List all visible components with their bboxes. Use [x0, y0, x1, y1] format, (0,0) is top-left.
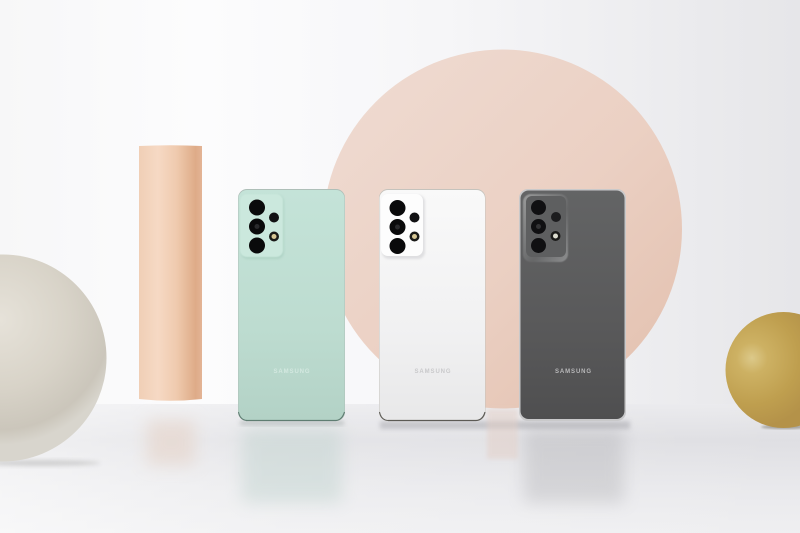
- logo: SAMSUNG: [274, 369, 310, 375]
- background wall: [0, 0, 800, 410]
- phone: mint: [238, 189, 345, 421]
- pink disc: [323, 50, 682, 408]
- phone: white: [379, 189, 486, 421]
- logo: SAMSUNG: [415, 369, 451, 375]
- floor: [0, 404, 800, 533]
- camera module: [523, 194, 568, 262]
- phone: gray: [519, 189, 626, 421]
- logo: SAMSUNG: [555, 369, 592, 375]
- cream sphere: [0, 254, 106, 466]
- camera module: [240, 194, 284, 259]
- peach cylinder: [139, 145, 202, 465]
- camera module: [381, 194, 425, 259]
- floor reflections: [240, 409, 630, 503]
- gold sphere: [726, 312, 800, 429]
